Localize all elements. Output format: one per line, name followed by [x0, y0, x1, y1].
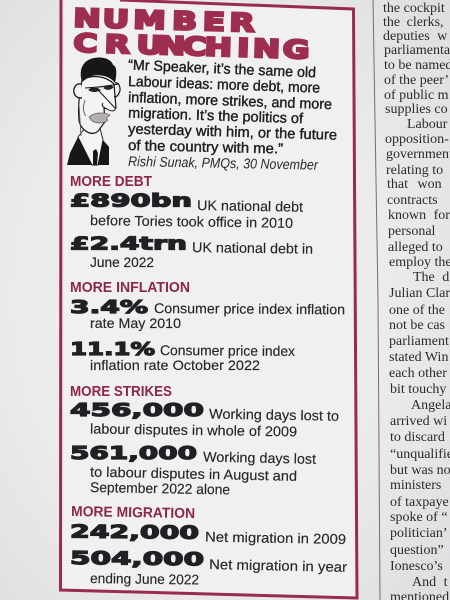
section: more inflation	[70, 280, 345, 373]
adjacent newspaper column text: known for	[388, 208, 450, 223]
section: more strikes: MORE STRIKES	[70, 384, 172, 400]
adjacent newspaper column text: stated Win	[389, 350, 448, 365]
adjacent newspaper column text: the clerks,	[383, 15, 444, 30]
adjacent newspaper column text: one of the	[389, 303, 445, 318]
section: more inflation: Consumer price index inflation	[154, 300, 345, 317]
section: more inflation: inflation rate October 2022	[90, 357, 260, 373]
quote: migration. It’s the politics of	[128, 106, 304, 127]
section: more migration	[70, 504, 348, 588]
adjacent newspaper column text: parliamenta	[384, 43, 450, 58]
adjacent newspaper column text: bit touchy	[390, 382, 446, 397]
section: more debt: UK national debt in	[192, 239, 313, 257]
title	[73, 3, 310, 65]
section: more debt: June 2022	[90, 254, 154, 270]
adjacent newspaper column text: question”	[390, 543, 444, 558]
adjacent newspaper column text: Julian Clar	[389, 286, 450, 301]
quote: yesterday with him, or the future	[128, 122, 337, 144]
adjacent newspaper column text: alleged to	[388, 240, 443, 255]
section: more debt: MORE DEBT	[70, 174, 152, 190]
quote: inflation, more strikes, and more	[128, 90, 332, 113]
title: CRUNCHING	[73, 28, 310, 65]
adjacent newspaper column text: but was no	[390, 463, 450, 478]
adjacent newspaper column text: spoke of “	[390, 510, 448, 525]
title: NUMBER	[73, 3, 255, 38]
adjacent newspaper column text: relating to	[386, 163, 443, 178]
quote: Rishi Sunak, PMQs, 30 November	[128, 153, 319, 173]
section: more debt: UK national debt	[197, 197, 303, 215]
adjacent newspaper column text: politician’	[390, 526, 448, 541]
section: more strikes: 456,000	[70, 400, 204, 421]
adjacent newspaper column text: opposition-	[385, 132, 449, 147]
adjacent newspaper column text: arrived wi	[390, 414, 447, 429]
adjacent newspaper column text: parliament	[389, 334, 449, 349]
adjacent newspaper column text: The d	[413, 270, 449, 285]
section: more inflation: 3.4%	[70, 297, 148, 318]
adjacent newspaper column text: contracts	[387, 193, 438, 208]
section: more debt	[70, 174, 313, 270]
adjacent newspaper column text: Labour	[407, 117, 448, 132]
section: more inflation: 11.1%	[70, 339, 155, 360]
adjacent newspaper column text: ministers	[390, 478, 441, 493]
adjacent newspaper column text: Ionesco’s	[390, 559, 443, 574]
section: more strikes: Working days lost to	[209, 406, 339, 424]
section: more debt: before Tories took office in 2010	[90, 212, 293, 231]
section: more migration: 504,000	[70, 548, 204, 570]
quote: Labour ideas: more debt, more	[128, 74, 320, 97]
adjacent newspaper column text: of the peer’	[384, 73, 449, 88]
adjacent newspaper column text: supplies co	[385, 102, 448, 117]
quote	[128, 58, 337, 173]
adjacent newspaper column text: employ the	[389, 255, 450, 270]
section: more strikes: Working days lost	[203, 449, 316, 467]
section: more debt: £2.4trn	[70, 234, 187, 254]
section: more strikes: September 2022 alone	[90, 479, 230, 497]
adjacent newspaper column text: that won	[387, 177, 442, 192]
section: more strikes: 561,000	[70, 443, 197, 464]
section: more migration: Net migration in 2009	[205, 529, 346, 547]
adjacent newspaper column text: deputies w	[383, 29, 448, 44]
section: more strikes: labour disputes in whole of 2009	[90, 421, 297, 439]
adjacent newspaper column text: the cockpit	[383, 1, 445, 16]
icon: caricature of Rishi Sunak	[67, 57, 120, 165]
adjacent newspaper column text: to discard	[390, 430, 445, 445]
adjacent newspaper column text: not be cas	[389, 318, 445, 333]
adjacent newspaper column text: each other	[389, 366, 447, 381]
section: more migration: 242,000	[70, 522, 199, 544]
adjacent newspaper column text: And t	[412, 575, 448, 590]
section: more strikes	[70, 384, 339, 497]
section: more inflation: Consumer price index	[160, 342, 295, 359]
quote: of the country with me.”	[128, 138, 283, 158]
adjacent newspaper column text	[383, 1, 450, 600]
section: more migration: Net migration in year	[209, 556, 348, 575]
adjacent newspaper column text: of taxpaye	[390, 495, 449, 510]
column rule	[373, 0, 380, 600]
adjacent newspaper column text: of public m	[384, 88, 449, 103]
quote: “Mr Speaker, it’s the same old	[128, 58, 316, 81]
section: more migration: MORE MIGRATION	[71, 504, 195, 522]
section: more inflation: rate May 2010	[90, 315, 181, 331]
section: more migration: ending June 2022	[90, 570, 199, 588]
panel: number crunching box	[60, 0, 357, 598]
adjacent newspaper column text: personal	[388, 224, 436, 239]
section: more debt: £890bn	[70, 190, 192, 212]
section: more strikes: to labour disputes in August and	[90, 464, 297, 484]
section: more inflation: MORE INFLATION	[70, 280, 190, 296]
